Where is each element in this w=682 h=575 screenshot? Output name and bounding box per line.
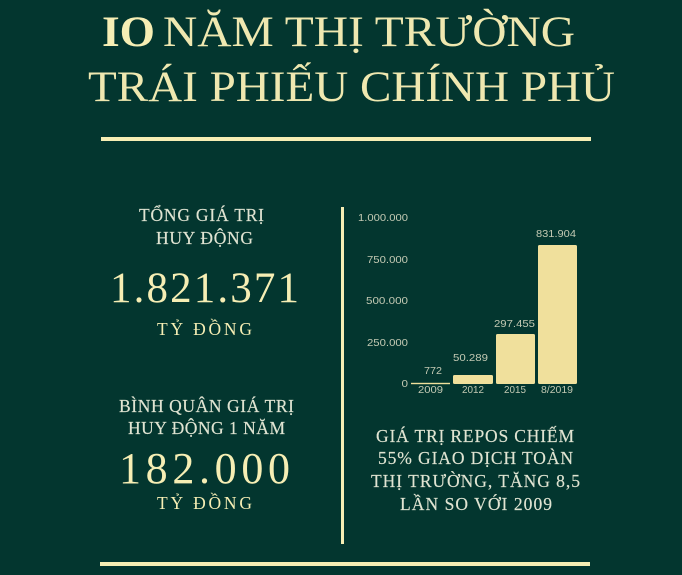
x axis labels: 8/2019 (541, 384, 573, 396)
x axis labels: 2012 (462, 384, 484, 396)
value labels: 297.455 (494, 318, 535, 330)
x axis labels: 2015 (504, 384, 526, 396)
y axis labels: 0 (402, 378, 408, 390)
y axis labels (358, 212, 408, 390)
value labels: 50.289 (453, 352, 488, 364)
panel: yearly average (119, 396, 294, 513)
y axis labels: 1.000.000 (358, 212, 408, 224)
y axis labels: 750.000 (367, 254, 408, 266)
panel: total value (110, 205, 299, 339)
vertical divider (341, 207, 344, 544)
panel: total value: TỔNG GIÁ TRỊ (139, 205, 264, 225)
title: IO (102, 9, 155, 56)
title: NĂM THỊ TRƯỜNG (163, 9, 575, 56)
repos note: THỊ TRƯỜNG, TĂNG 8,5 (371, 471, 580, 491)
panel: total value: HUY ĐỘNG (156, 228, 253, 248)
value labels: 831.904 (536, 228, 576, 240)
repos note: 55% GIAO DỊCH TOÀN (378, 448, 573, 468)
panel: yearly average: 182.000 (119, 444, 290, 493)
panel: yearly average: TỶ ĐỒNG (157, 493, 252, 513)
repos note (371, 426, 580, 514)
x axis labels (418, 384, 573, 396)
x axis labels: 2009 (418, 384, 443, 396)
title: TRÁI PHIẾU CHÍNH PHỦ (88, 63, 615, 111)
bar chart (358, 212, 577, 396)
value labels (424, 228, 576, 377)
y axis labels: 500.000 (366, 295, 408, 307)
panel: total value: 1.821.371 (110, 265, 299, 312)
repos note: LẦN SO VỚI 2009 (400, 494, 552, 514)
y axis labels: 250.000 (367, 337, 408, 349)
top rule (101, 137, 591, 141)
bars (411, 245, 577, 384)
title (88, 9, 615, 111)
panel: yearly average: BÌNH QUÂN GIÁ TRỊ (119, 396, 294, 416)
bottom rule (100, 562, 590, 566)
value labels: 772 (424, 365, 442, 377)
panel: yearly average: HUY ĐỘNG 1 NĂM (128, 418, 285, 438)
repos note: GIÁ TRỊ REPOS CHIẾM (376, 426, 574, 446)
panel: total value: TỶ ĐỒNG (157, 319, 252, 339)
